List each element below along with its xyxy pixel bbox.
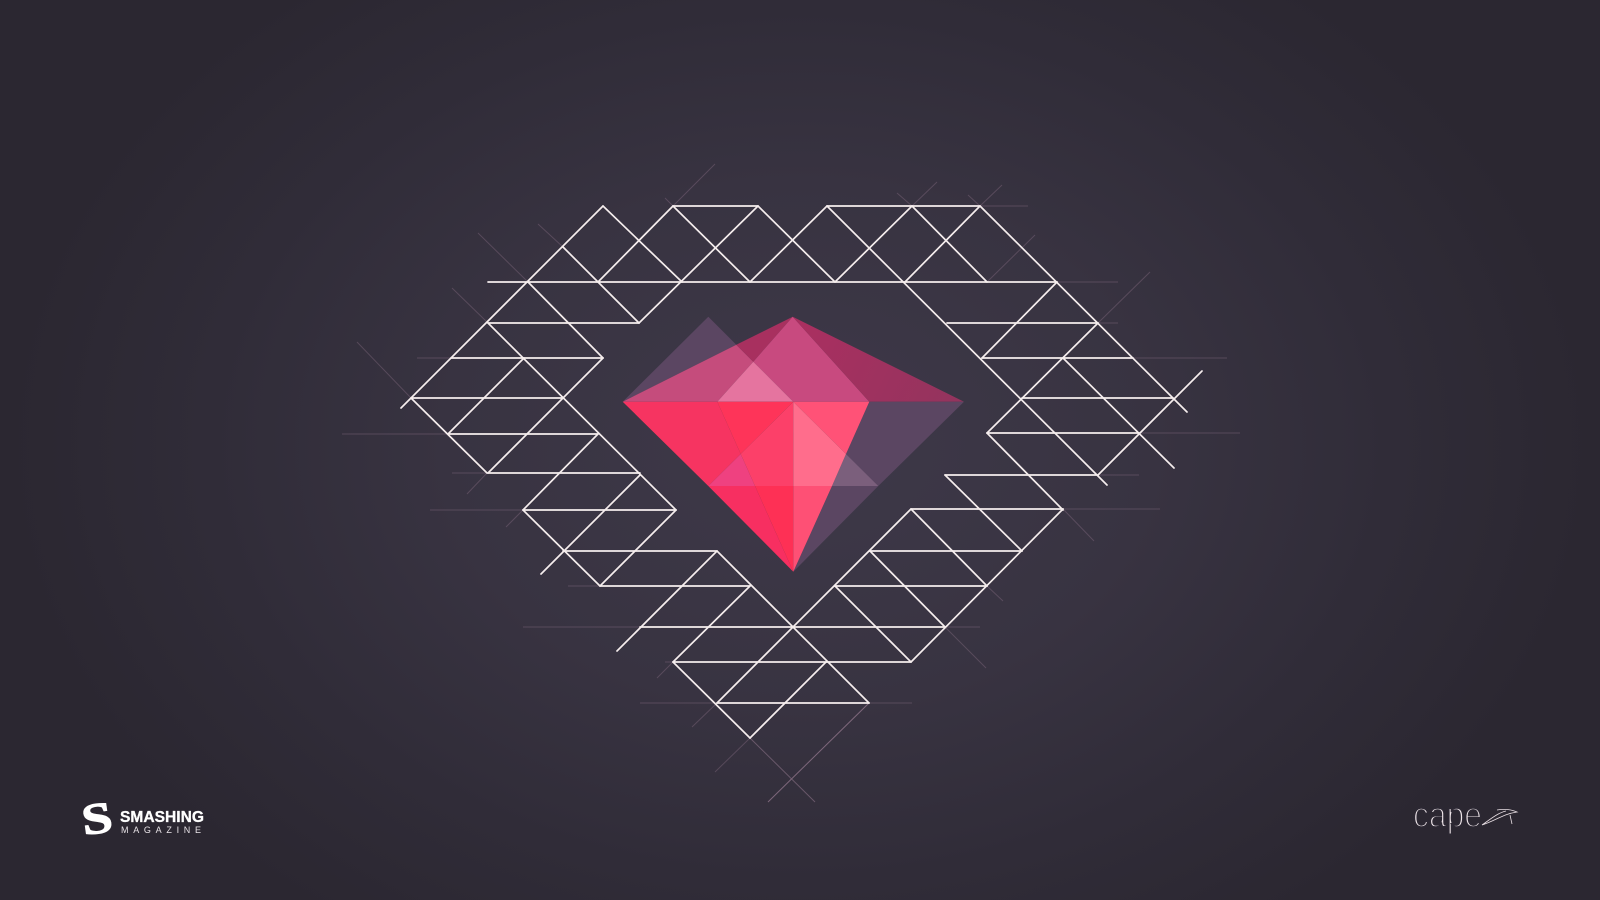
rising diagonals <box>401 206 1202 738</box>
logo subtitle: MAGAZINE <box>121 825 201 835</box>
falling diagonals <box>411 206 1187 738</box>
gem <box>623 317 964 572</box>
Smashing Magazine logo <box>78 792 204 845</box>
diamond wireframe grid <box>401 206 1202 738</box>
gem crown facets <box>623 317 964 402</box>
stronger construction lines <box>750 703 869 802</box>
cape logo <box>1413 794 1517 835</box>
cape bird icon <box>1482 809 1517 825</box>
logo wordmark: SMASHING <box>120 809 204 826</box>
faint construction lines <box>342 164 1240 802</box>
gem front facets <box>623 402 869 572</box>
gem back facets <box>793 402 964 572</box>
logo mark: S <box>78 792 116 845</box>
cape wordmark: cape <box>1413 794 1482 835</box>
horizontal grid lines <box>411 206 1173 703</box>
